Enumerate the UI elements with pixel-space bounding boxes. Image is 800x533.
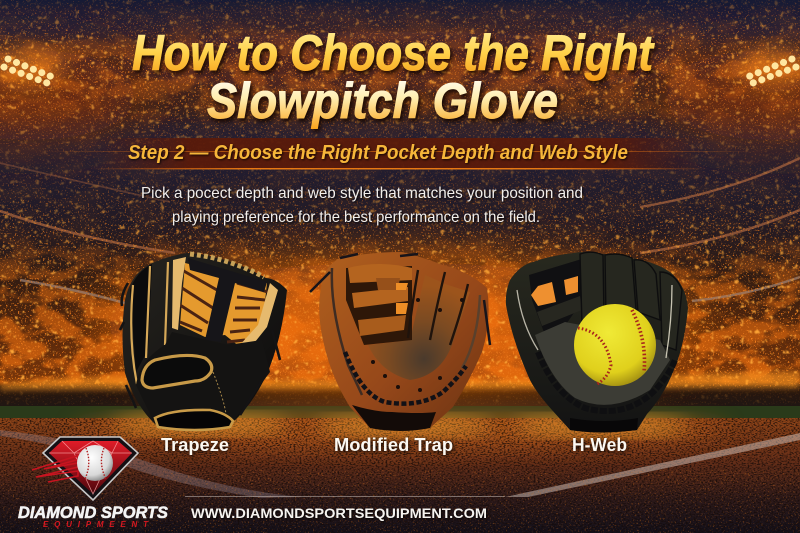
web lacing (180, 270, 268, 342)
inner edge (332, 268, 362, 395)
wrist opening (155, 410, 233, 430)
logo wordmark: DIAMOND SPORTS (18, 503, 169, 522)
stand tiers (0, 158, 800, 303)
lower shell (136, 332, 270, 424)
title line 2: Slowpitch Glove (207, 73, 558, 129)
edge stripes (517, 290, 538, 350)
finger stripes (130, 264, 152, 372)
logo tagline: EQUIPMEENT (43, 520, 149, 529)
palm holes (371, 298, 464, 392)
title line 1: How to Choose the Right (132, 25, 655, 81)
website url: WWW.DIAMONDSPORTSEQUIPMENT.COM (191, 505, 487, 521)
footer divider (185, 496, 505, 497)
web bars (346, 264, 412, 345)
ball stitches (578, 328, 611, 384)
glove: Modified Trap (310, 252, 490, 431)
step banner (40, 138, 760, 170)
left tan panel (172, 257, 186, 330)
speed lines (32, 455, 80, 482)
loose laces (120, 283, 280, 415)
lacing (345, 352, 466, 404)
web bars (529, 258, 585, 335)
label: Trapeze: Trapeze (161, 435, 229, 455)
glove body (319, 252, 489, 430)
lacing (538, 352, 675, 411)
logo baseball (77, 445, 113, 481)
glove: Trapeze (120, 253, 287, 430)
binding top (190, 254, 264, 277)
right tan panel (238, 283, 278, 352)
web opening (180, 263, 267, 347)
title (132, 25, 655, 129)
stadium lights right (736, 50, 800, 86)
palm (535, 322, 670, 405)
finger seams (408, 270, 468, 345)
palm (368, 275, 470, 380)
logo: Diamond Sports Equipment (18, 437, 169, 529)
fire horizon glow (0, 372, 800, 390)
intro text (141, 185, 583, 226)
stadium lights left (0, 50, 64, 86)
wrist strap (142, 355, 212, 388)
wrist opening (570, 418, 638, 432)
label: Modified Trap: Modified Trap (334, 435, 453, 455)
fingers (580, 252, 682, 350)
glove: H-Web with softball (506, 252, 688, 432)
logo diamond (43, 437, 138, 500)
intro text: Pick a pocect depth and web style that matches your position and (141, 185, 583, 202)
label: H-Web: H-Web (572, 435, 627, 455)
softball (574, 304, 656, 386)
stitching (213, 372, 226, 414)
stadium background (0, 0, 800, 406)
step heading: Step 2 — Choose the Right Pocket Depth and Web Style (128, 142, 628, 164)
outfield grass strip (0, 406, 800, 419)
dirt infield (0, 408, 800, 533)
wrist opening (352, 405, 436, 431)
intro text: playing preference for the best performance on the field. (172, 209, 540, 226)
T web (188, 258, 267, 342)
glove body (506, 252, 688, 432)
glove body (122, 253, 287, 428)
ground glow under gloves (110, 416, 690, 434)
